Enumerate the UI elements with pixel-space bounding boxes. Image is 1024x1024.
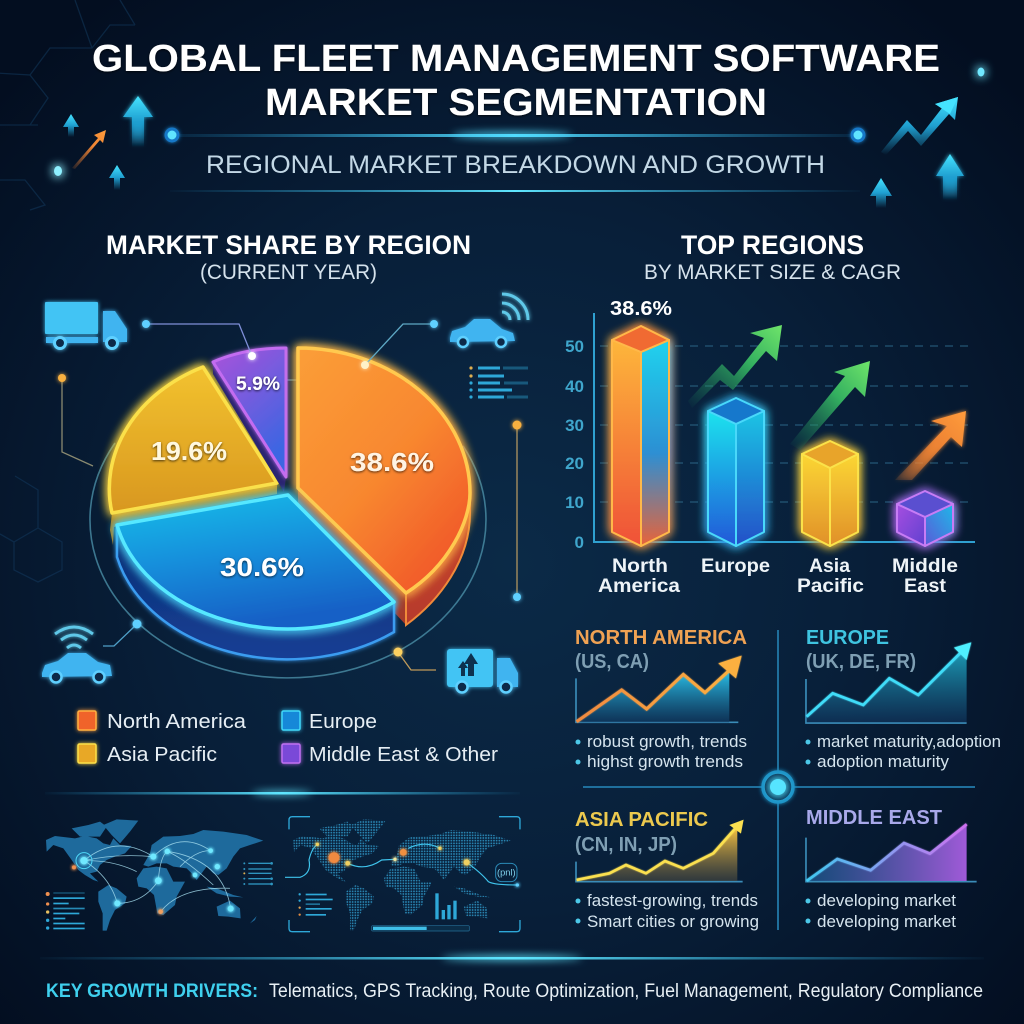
arrow: Europe growth [688, 325, 782, 408]
bullet list: Asia Pacific: Smart cities or growing [587, 913, 759, 931]
legend [78, 711, 498, 766]
bullet list: North America: robust growth, trends [587, 733, 747, 751]
value label: North America: 38.6% [610, 298, 672, 320]
line chart: North America [576, 656, 742, 722]
progress bar [372, 926, 469, 931]
bar: North America [612, 326, 669, 546]
heading: top regions: TOP REGIONS [681, 230, 864, 260]
icon: cargo truck bottom right [447, 649, 518, 692]
legend item: Asia Pacific: Asia Pacific [107, 744, 217, 766]
title: MARKET SEGMENTATION [265, 82, 767, 124]
y axis labels: 40 [565, 377, 584, 396]
bullet list: Middle East: developing market [817, 913, 956, 931]
pie slice: Middle East and Other 5.9%: 5.9% [236, 374, 280, 395]
panel: Asia Pacific [575, 808, 759, 931]
subheading: US CA: (US, CA) [575, 651, 649, 673]
quadrant cross divider [583, 630, 975, 930]
bullet list: Europe: adoption maturity [817, 753, 950, 771]
pie chart: market share by region [90, 348, 486, 678]
arrow: Middle East growth [895, 411, 966, 480]
heading: market share by region [106, 230, 471, 284]
route lines [285, 844, 517, 885]
map: connection arcs [84, 842, 231, 912]
bullet list: Asia Pacific [576, 892, 759, 931]
bar: Europe [708, 398, 764, 546]
panel: connected world map [46, 819, 273, 931]
icon: left growth arrows [54, 96, 153, 190]
bullet list: Middle East: developing market [817, 892, 956, 910]
heading: top regions: BY MARKET SIZE & CAGR [644, 261, 901, 284]
bullet list: Europe [806, 733, 1001, 771]
chart axes [594, 313, 975, 542]
footer: key growth drivers: Telematics, GPS Tracking, Route Optimization, Fuel Management, Regulatory Compliance [269, 981, 983, 1002]
heading: North America: NORTH AMERICA [575, 626, 747, 649]
x axis labels: Europe [701, 556, 770, 577]
subheading: UK DE FR: (UK, DE, FR) [806, 651, 916, 673]
map: left data list [46, 892, 85, 930]
pie slice: Middle East and Other 5.9% [213, 348, 286, 492]
bar: Middle East [897, 491, 953, 546]
section divider above maps [45, 791, 520, 795]
y axis labels: 30 [565, 416, 584, 435]
decorative hexagon network [0, 0, 135, 582]
legend item: Middle East and Other: Middle East & Other [309, 744, 498, 766]
heading: top regions [644, 230, 901, 284]
pie slice: Asia Pacific 19.6% [109, 367, 277, 545]
footer: key growth drivers: KEY GROWTH DRIVERS: [46, 981, 258, 1002]
heading: market share by region: (CURRENT YEAR) [200, 261, 377, 284]
bullet list: Asia Pacific: fastest-growing, trends [587, 892, 758, 910]
x axis labels: Middle [892, 556, 958, 577]
icon: connected car bottom left [42, 627, 112, 682]
line chart: Asia Pacific [576, 820, 744, 882]
corner frame [289, 817, 520, 932]
y axis labels: 0 [575, 533, 584, 552]
y axis labels: 50 [565, 337, 584, 356]
map: right data list [243, 862, 273, 885]
x axis labels: North [612, 556, 668, 577]
icon: right growth arrows [870, 68, 984, 208]
panel: Europe [806, 626, 1001, 771]
subheading: CN IN JP: (CN, IN, JP) [575, 834, 677, 856]
line chart: Europe [806, 642, 971, 723]
subtitle: REGIONAL MARKET BREAKDOWN AND GROWTH [206, 151, 825, 179]
bullet list: Middle East [806, 892, 956, 931]
legend item: Europe [282, 711, 377, 733]
connector lines and nodes around pie [58, 320, 522, 670]
pie slice: North America 38.6% [298, 348, 470, 625]
pie slice: North America 38.6%: 38.6% [350, 447, 434, 477]
pie slice: Europe 30.6% [117, 495, 394, 659]
subtitle divider [170, 190, 860, 192]
x axis labels: Pacific [797, 576, 864, 597]
panel: North America [575, 626, 747, 771]
icon: mini data list [469, 366, 528, 399]
bullet list: North America: highst growth trends [587, 753, 743, 771]
title [92, 38, 940, 124]
legend item: North America: North America [107, 711, 247, 733]
mini data list [298, 893, 333, 916]
legend item: Europe: Europe [309, 711, 377, 733]
y axis labels [565, 337, 584, 552]
header divider with end nodes [166, 129, 864, 141]
icon: connected car top right [450, 294, 528, 347]
mini bar chart [435, 893, 457, 919]
panel: dotted world map dashboard [285, 817, 520, 932]
bullet list: Europe: market maturity,adoption [817, 733, 1001, 751]
map: continents [46, 819, 263, 931]
heading: Middle East: MIDDLE EAST [806, 806, 942, 829]
x axis labels: America [598, 576, 680, 597]
bullet list: North America [576, 733, 747, 771]
pnl badge: (pnl) [497, 867, 516, 877]
heading: market share by region: MARKET SHARE BY REGION [106, 230, 471, 260]
pie slice: Asia Pacific 19.6%: 19.6% [151, 436, 227, 466]
bar: Asia Pacific [802, 441, 858, 546]
bar chart: top regions [565, 298, 975, 597]
arrow: Asia Pacific growth [790, 361, 870, 450]
map: glowing nodes [72, 848, 234, 914]
heading: Europe: EUROPE [806, 626, 889, 649]
map: dotted continents [293, 819, 511, 931]
pie slice: Europe 30.6%: 30.6% [220, 552, 304, 582]
x axis labels [598, 556, 958, 597]
gridlines [600, 346, 975, 502]
panel: Middle East [806, 806, 977, 931]
heading: Asia Pacific: ASIA PACIFIC [575, 808, 708, 831]
x axis labels: East [904, 576, 947, 597]
x axis labels: Asia [809, 556, 850, 577]
pnl badge [496, 863, 517, 882]
icon: delivery truck top left [45, 302, 127, 348]
y axis labels: 10 [565, 493, 584, 512]
y axis labels: 20 [565, 454, 584, 473]
bottom glow divider [40, 956, 984, 960]
line chart: Middle East [806, 824, 977, 882]
hotspot nodes [316, 843, 519, 887]
title: GLOBAL FLEET MANAGEMENT SOFTWARE [92, 38, 940, 80]
